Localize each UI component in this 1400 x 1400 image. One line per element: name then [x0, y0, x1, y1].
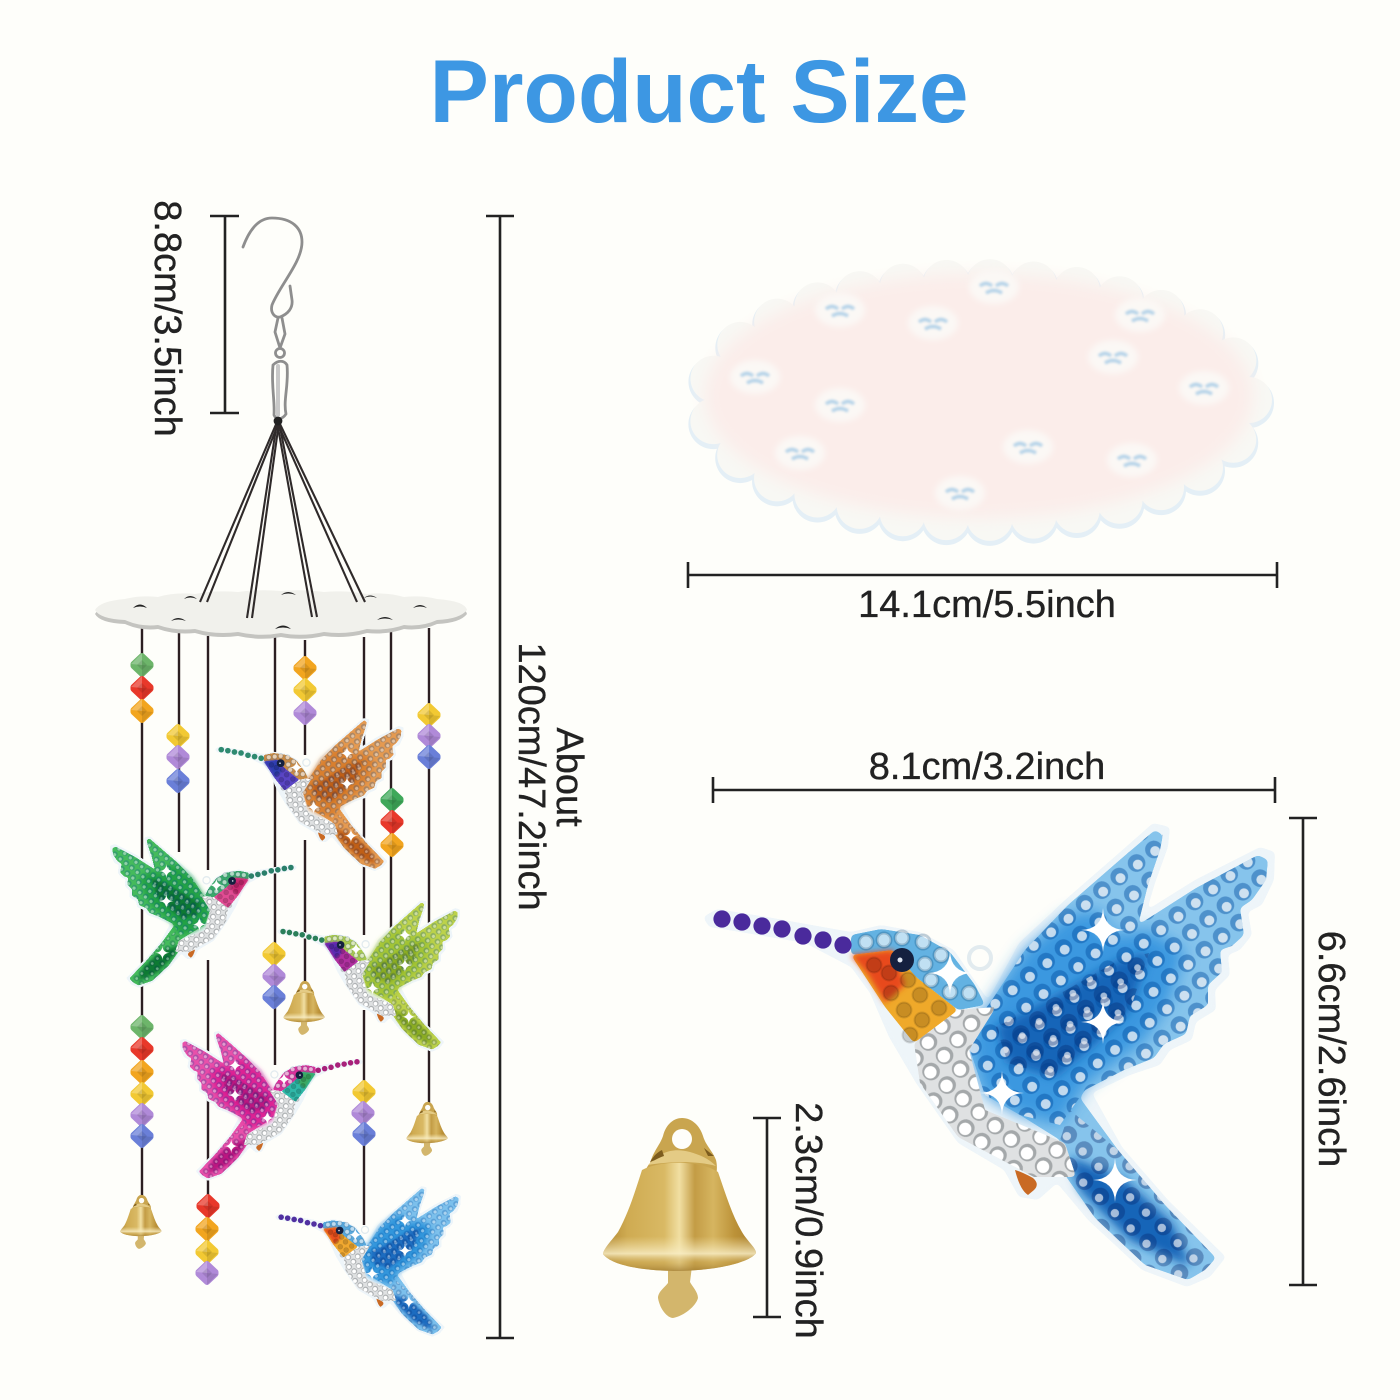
bird: yellow-green	[277, 900, 460, 1052]
title: Product Size	[429, 41, 969, 141]
dimension: total length: 120cm/47.2inch	[510, 642, 552, 911]
dimension: total length	[486, 216, 590, 1338]
dimension: bird width	[713, 746, 1275, 803]
dimension: bird width: 8.1cm/3.2inch	[869, 746, 1105, 788]
dimension: hook height	[146, 200, 239, 437]
panel: large blue hummingbird	[703, 823, 1275, 1287]
dimension: hook height: 8.8cm/3.5inch	[146, 200, 188, 437]
bird: green	[110, 836, 297, 988]
dimension: disc width: 14.1cm/5.5inch	[858, 584, 1116, 626]
dimension: bird height: 6.6cm/2.6inch	[1310, 931, 1352, 1167]
crystal beads	[131, 653, 440, 1285]
bird: pink	[180, 1031, 363, 1181]
dimension: disc width	[688, 562, 1277, 626]
hanging strings	[142, 628, 429, 1280]
bird: blue	[275, 1186, 461, 1337]
bird: orange	[215, 718, 404, 871]
panel: scalloped disc	[705, 270, 1253, 521]
dimension: bell height: 2.3cm/0.9inch	[787, 1102, 829, 1339]
cords	[200, 422, 365, 618]
dimension: bell height	[753, 1102, 829, 1339]
scalloped top disc	[95, 590, 467, 639]
dimension: bird height	[1289, 818, 1352, 1285]
dimension: total length: About	[548, 727, 590, 827]
disc holes	[730, 270, 1229, 510]
small bells	[120, 981, 448, 1249]
hook and swivel	[243, 218, 302, 424]
panel: gold bell	[603, 1118, 756, 1318]
panel: assembled wind chime	[95, 218, 467, 1337]
